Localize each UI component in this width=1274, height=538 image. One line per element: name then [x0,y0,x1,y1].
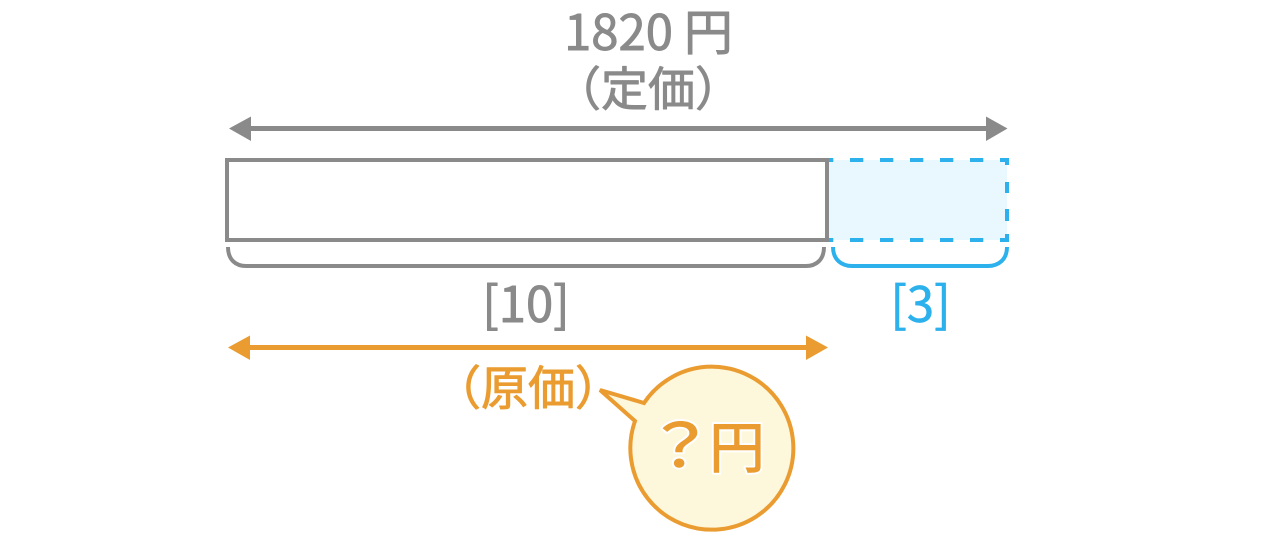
arrow: cost width [228,336,828,360]
callout text: question mark: ？ [645,397,715,485]
callout: unknown price [600,367,793,530]
callout text: yen: 円 [709,404,765,485]
label: ratio 10: [10] [482,266,570,337]
label: ratio 3: [3] [890,266,951,337]
heading: list price label: （定価） [554,51,742,120]
arrow: total width [229,116,1008,141]
label: cost price: （原価） [434,350,622,419]
bar: markup portion [829,158,1009,242]
bracket: markup [833,247,1007,266]
bar: cost portion [227,160,827,240]
bracket: cost [228,247,824,266]
